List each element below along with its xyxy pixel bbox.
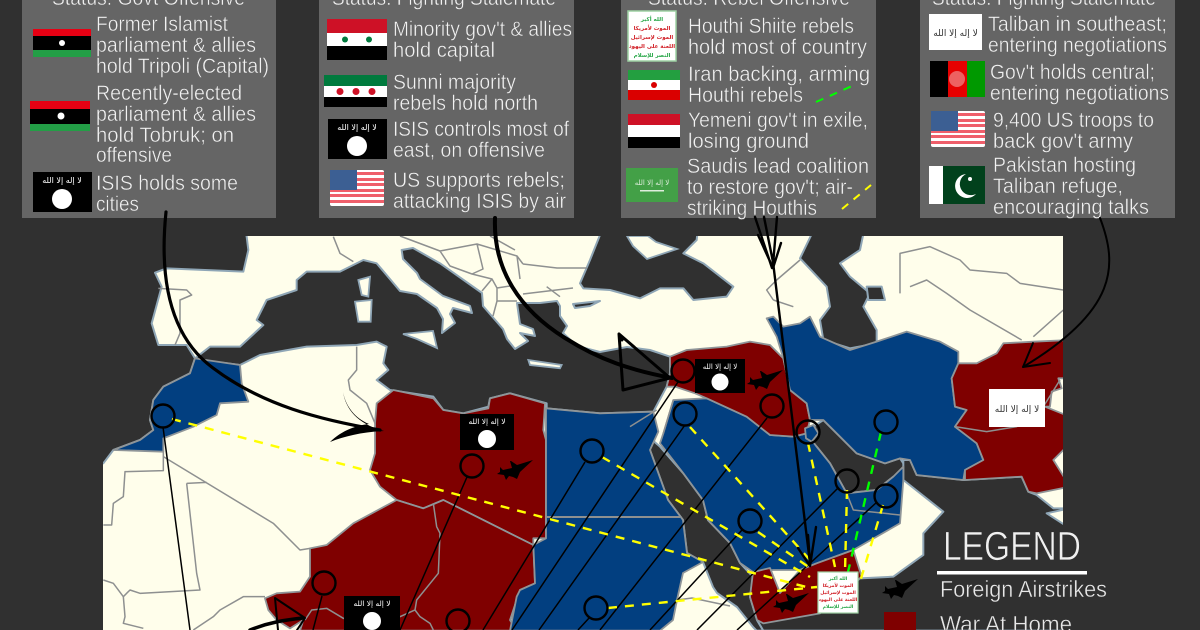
legend icon: foreign airstrikes: [882, 579, 918, 599]
panel text: Syria: [332, 0, 572, 213]
legend label: foreign airstrikes: Foreign Airstrikes: [940, 576, 1107, 602]
panel text: Afghanistan: entering negotiations: [988, 34, 1167, 57]
flag: Saudi Arabia: لا إله إلا الله: [635, 179, 669, 187]
panel: Afghanistan: [920, 0, 1175, 219]
panel text: Afghanistan: 9,400 US troops to: [993, 109, 1154, 132]
panel: Syria: [319, 0, 574, 218]
flag: Syria: [327, 19, 387, 60]
yellow dashed alliance lines: [172, 419, 883, 608]
flag: Houthi: الموت لأمريكا: [634, 24, 671, 32]
flag on map: Houthi: الموت لأمريكا: [823, 582, 854, 589]
panel text: Afghanistan: back gov't army: [993, 130, 1133, 153]
flag on map: Houthi: الله أكبر: [828, 575, 848, 582]
panel text: Syria: east, on offensive: [393, 139, 545, 162]
panel text: Afghanistan: Gov't holds central;: [990, 61, 1155, 84]
flag on map: ISIS Nigeria: [344, 596, 400, 630]
panel text: Syria: hold capital: [393, 39, 495, 62]
arrow: Syria panel to Syria: [495, 218, 672, 390]
panel text: Afghanistan: Taliban refuge,: [993, 175, 1123, 198]
callout: Saudi coalition yellow dash key: [842, 185, 871, 209]
panel text: Libya: offensive: [96, 144, 172, 167]
panel text: Yemen: to restore gov't; air-: [687, 176, 853, 199]
connector lines from circles: [163, 382, 877, 630]
panel text: Yemen: striking Houthis: [687, 197, 817, 220]
flag on map: Houthi: [818, 572, 858, 613]
flag: Syrian rebels: [324, 75, 387, 107]
panel text: Afghanistan: entering negotiations: [990, 82, 1169, 105]
flag: ISIS: لا إله إلا الله: [337, 123, 377, 133]
flag on map: ISIS Syria/Iraq: لا إله إلا الله: [703, 363, 737, 371]
panel text: Yemen: Yemeni gov't in exile,: [688, 109, 868, 132]
flag: Houthi: النصر للإسلام: [634, 53, 671, 59]
flag on map: Houthi: النصر للإسلام: [823, 605, 854, 610]
panel text: Libya: cities: [96, 193, 139, 216]
seas and countries east: [510, 210, 1070, 630]
flag: Houthi: الموت لإسرائيل: [631, 35, 673, 41]
arrow: Yemen panel to Yemen: [755, 217, 816, 566]
flag: Houthi: اللعنة على اليهود: [629, 44, 675, 50]
flag: Pakistan: [929, 166, 985, 204]
panel text: Yemen: Iran backing, arming: [688, 63, 870, 86]
flag on map: ISIS Syria/Iraq: [695, 359, 745, 393]
panel text: Syria: rebels hold north: [393, 92, 538, 115]
icon: jet over Syria/Iraq: [747, 370, 783, 390]
flag on map: Taliban: [989, 389, 1045, 427]
panel text: Libya: parliament & allies: [96, 103, 256, 126]
flag: Yemen: [628, 114, 680, 148]
seas and countries west: [0, 197, 670, 630]
flag on map: Taliban: لا إله إلا الله: [995, 405, 1039, 415]
panel text: Syria: Sunni majority: [393, 71, 516, 94]
panel text: Yemen: Houthi Shiite rebels: [688, 15, 854, 38]
flag on map: ISIS Libya: لا إله إلا الله: [468, 417, 506, 426]
arrow: Afghanistan panel to Afghanistan: [1023, 218, 1109, 367]
flag: Afghanistan: [930, 61, 985, 97]
panel text: Libya: [52, 0, 269, 216]
marker circles: [152, 360, 898, 630]
panel text: Libya: ISIS holds some: [96, 172, 238, 195]
panel text: Afghanistan: Taliban in southeast;: [988, 13, 1167, 36]
panel text: Syria: US supports rebels;: [393, 169, 565, 192]
panel text: Syria: ISIS controls most of: [393, 118, 569, 141]
panel text: Yemen: Houthi rebels: [688, 84, 803, 107]
panel: Libya: [22, 0, 276, 218]
panel text: Afghanistan: Pakistan hosting: [993, 154, 1136, 177]
flag: Libya: [33, 29, 91, 57]
flag on map: ISIS Libya: [460, 414, 514, 450]
flag: United States: [330, 170, 384, 206]
flag on map: ISIS Nigeria: لا إله إلا الله: [353, 599, 391, 608]
panel text: Yemen: hold most of country: [688, 36, 867, 59]
panel text: Afghanistan: encouraging talks: [993, 196, 1149, 219]
flag: Houthi: [628, 11, 676, 61]
panel text: Libya: hold Tripoli (Capital): [96, 55, 269, 78]
panel text: Syria: attacking ISIS by air: [393, 190, 566, 213]
icon: jet over Libya: [497, 460, 533, 480]
panel text: Afghanistan: [932, 0, 1169, 219]
panel text: Yemen: [648, 0, 870, 220]
legend: [882, 523, 1107, 630]
panel text: Yemen: Saudis lead coalition: [687, 155, 869, 178]
flag: Taliban: [929, 14, 982, 50]
panel text: Libya: Recently-elected: [96, 82, 242, 105]
icon: jet over Yemen: [773, 593, 809, 613]
flag: ISIS: لا إله إلا الله: [42, 176, 82, 186]
panel text: Libya: Former Islamist: [96, 13, 228, 36]
panel text: Syria: Minority gov't & allies: [393, 18, 572, 41]
callout: Iran backing green dash key: [816, 86, 852, 102]
arrow: lower left: [250, 598, 305, 630]
legend swatch: war at home: [884, 612, 916, 630]
flag on map: Houthi: الموت لإسرائيل: [820, 591, 856, 596]
panel text: Yemen: losing ground: [688, 130, 809, 153]
panel text: Libya: parliament & allies: [96, 34, 256, 57]
map of North Africa and the Middle East: [0, 197, 1070, 630]
flag: Houthi: الله أكبر: [640, 15, 663, 23]
Egypt and Sudan border: [546, 516, 680, 518]
flag: Libya: [30, 101, 90, 131]
flag: ISIS: [328, 119, 387, 159]
Balkan country borders: [400, 236, 587, 316]
flag on map: Houthi: اللعنة على اليهود: [819, 598, 858, 603]
flag: ISIS: [33, 172, 92, 212]
legend title: LEGEND: [943, 523, 1081, 569]
flag: Taliban: لا إله إلا الله: [933, 29, 978, 39]
arrow: Libya panel to Libya: [164, 212, 384, 442]
panel text: Libya: hold Tobruk; on: [96, 124, 234, 147]
flag: Iran: [628, 70, 680, 100]
panel: Yemen: [621, 0, 876, 220]
green dashed line: Iran to Yemen: [848, 432, 881, 572]
flag: Saudi Arabia: [626, 168, 678, 202]
flag: United States: [931, 111, 985, 147]
